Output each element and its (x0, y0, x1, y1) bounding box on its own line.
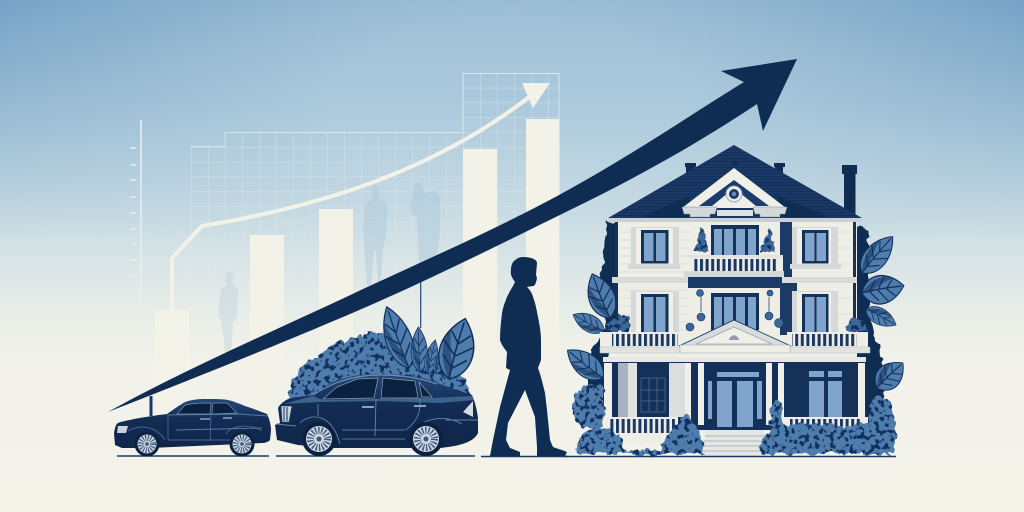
door seams (300, 398, 462, 444)
ground line (276, 455, 475, 457)
porch beam (603, 353, 866, 362)
large car (275, 374, 478, 456)
silhouette: person 1 (218, 272, 238, 355)
ground line (565, 456, 896, 458)
leaf (853, 229, 901, 280)
ground floor balustrades (600, 417, 868, 443)
headlight (117, 426, 128, 433)
walls (617, 220, 857, 360)
second floor center window (711, 293, 759, 330)
dark foliage behind house (586, 222, 884, 425)
shoulder band (283, 396, 474, 404)
thin rising white arrow (172, 83, 550, 312)
silhouette: person 2 (363, 186, 387, 287)
silhouette: person 3 with figure (410, 183, 440, 267)
leaf (860, 272, 906, 307)
cornice blocks (682, 207, 787, 217)
bush: right (760, 424, 896, 454)
front wheel (134, 432, 160, 456)
large navy rising arrow (108, 59, 797, 412)
bush and leaves behind large car (290, 303, 481, 398)
front steps (700, 430, 768, 457)
right ground floor window (809, 371, 842, 417)
walking man silhouette (481, 257, 568, 456)
oculus (726, 186, 742, 202)
rear wheel (230, 432, 254, 456)
leaf (560, 341, 610, 387)
background gradient (0, 0, 1024, 324)
second floor left window (631, 291, 679, 333)
front door (704, 363, 765, 428)
tail light (463, 401, 473, 417)
chimneys (685, 163, 857, 220)
car body (114, 399, 271, 448)
leaf (869, 354, 911, 397)
roof shadow beside gable (640, 196, 830, 217)
leaf (862, 302, 900, 332)
door handles (362, 406, 426, 407)
leaves right of house (853, 229, 911, 397)
bush: right column (868, 397, 896, 440)
grille (281, 406, 292, 422)
bush: center left (662, 414, 705, 454)
second floor right window (792, 291, 838, 333)
leaf: middle (410, 327, 428, 372)
small planters (686, 290, 784, 331)
left second-floor balcony (600, 332, 683, 353)
porch columns (604, 363, 865, 425)
leaf: middle small (422, 339, 441, 375)
upper right window (790, 227, 841, 269)
front gable (682, 160, 786, 208)
leaves left of house (560, 269, 622, 387)
roof highlight (313, 375, 437, 395)
leaf (580, 269, 622, 323)
front wheel (302, 422, 336, 456)
bumper strip (276, 420, 478, 426)
bush: low strip (628, 449, 662, 455)
roof (608, 145, 862, 218)
side pilasters (615, 222, 856, 332)
ground floor dark recess (603, 357, 866, 430)
upper center window (711, 225, 759, 256)
thin posts under large arrow (151, 282, 421, 416)
central pediment (679, 320, 791, 353)
faint silhouettes behind the chart (218, 183, 440, 355)
bush: center right column (769, 400, 782, 430)
bar chart: cream bars (155, 119, 560, 449)
siding lines (618, 232, 853, 330)
door seams (128, 415, 262, 441)
left ground floor panels (618, 363, 685, 417)
windows (323, 378, 432, 399)
bush: left tree (573, 384, 605, 430)
body highlight (167, 414, 268, 430)
rear wheel (409, 422, 443, 456)
floor band (612, 277, 857, 283)
wall shadow right of center bay (688, 220, 797, 335)
balcony shrubs (604, 314, 866, 332)
bush (290, 332, 470, 398)
leaf: large left (375, 303, 421, 372)
upper left window (628, 227, 680, 269)
topiary upper (695, 228, 776, 252)
bush: left low (577, 428, 628, 454)
door handles (200, 418, 232, 419)
house group (560, 145, 911, 457)
ground line (117, 455, 269, 457)
eave band (608, 218, 862, 222)
leaf (569, 307, 608, 338)
leaf: small right (431, 349, 447, 375)
leaf: large right (433, 314, 481, 383)
bushes around house (573, 384, 896, 455)
car body (275, 374, 478, 448)
right second-floor balcony (787, 332, 870, 353)
windows (177, 403, 237, 414)
chart: vertical axis with ticks (130, 120, 142, 286)
upper balcony (684, 255, 784, 277)
chart: faint grid (191, 73, 560, 258)
small car (114, 399, 271, 456)
